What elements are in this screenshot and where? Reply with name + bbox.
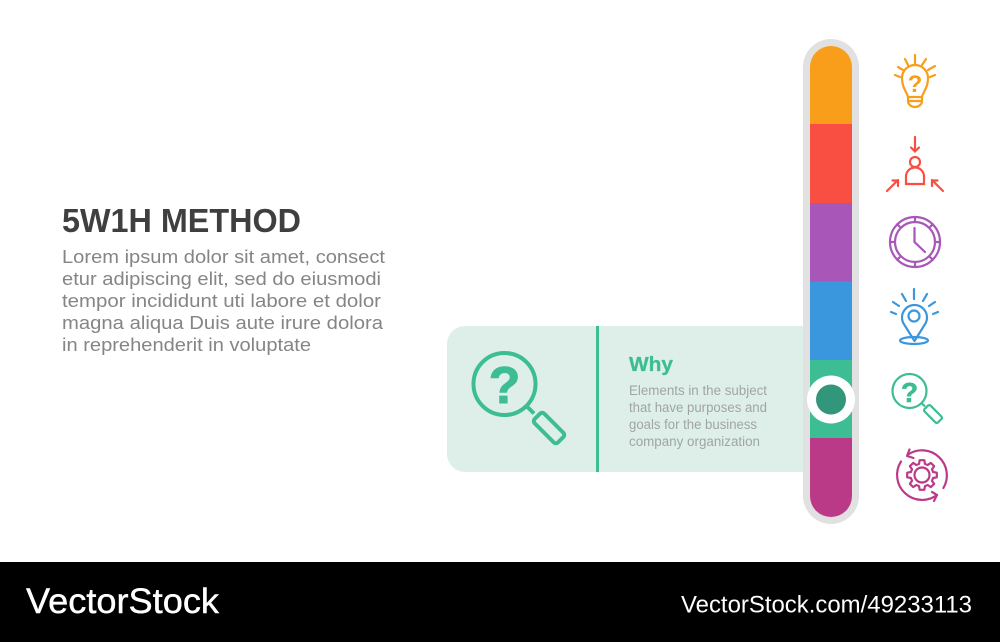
icon: large magnifier with question mark: ? xyxy=(489,357,520,415)
icon: small magnifier with question mark xyxy=(892,374,943,424)
segment: purple xyxy=(810,203,852,282)
icon: light bulb with question mark: ? xyxy=(908,71,922,98)
title: 5W1H METHOD xyxy=(62,202,301,239)
icon: gear with cycle arrows xyxy=(897,450,947,501)
card divider xyxy=(596,326,599,472)
icon: light bulb with question mark xyxy=(895,55,935,107)
segment: blue xyxy=(810,282,852,360)
icon: location pin xyxy=(891,289,938,344)
intro text block: etur adipiscing elit, sed do eiusmodi xyxy=(62,268,381,289)
card description: company organization xyxy=(629,434,760,449)
segment: orange xyxy=(810,46,852,124)
card heading: Why xyxy=(629,354,674,376)
card description: goals for the business xyxy=(629,417,757,432)
icon: clock xyxy=(890,217,940,267)
icon: person with arrows xyxy=(887,137,943,191)
segment: red xyxy=(810,124,852,203)
card description: that have purposes and xyxy=(629,400,767,415)
intro text block xyxy=(62,246,385,355)
footer band xyxy=(0,562,1000,642)
bar outer track xyxy=(803,39,859,524)
segment: magenta xyxy=(810,438,852,517)
footer id text: VectorStock.com/49233113 xyxy=(681,592,972,618)
segment: green xyxy=(810,360,852,438)
icon: large magnifier with question mark xyxy=(474,353,565,444)
intro text block: in reprehenderit in voluptate xyxy=(62,334,311,355)
vertical segmented bar xyxy=(803,39,859,524)
card background xyxy=(447,326,805,472)
active marker xyxy=(807,376,855,424)
intro text block: magna aliqua Duis aute irure dolora xyxy=(62,312,384,333)
footer logo text: VectorStock xyxy=(26,582,220,621)
intro text block: Lorem ipsum dolor sit amet, consect xyxy=(62,246,385,267)
card description xyxy=(629,383,767,449)
card description: Elements in the subject xyxy=(629,383,767,398)
intro text block: tempor incididunt uti labore et dolor xyxy=(62,290,381,311)
icon: small magnifier with question mark: ? xyxy=(901,377,918,408)
panel: why card xyxy=(447,326,805,472)
